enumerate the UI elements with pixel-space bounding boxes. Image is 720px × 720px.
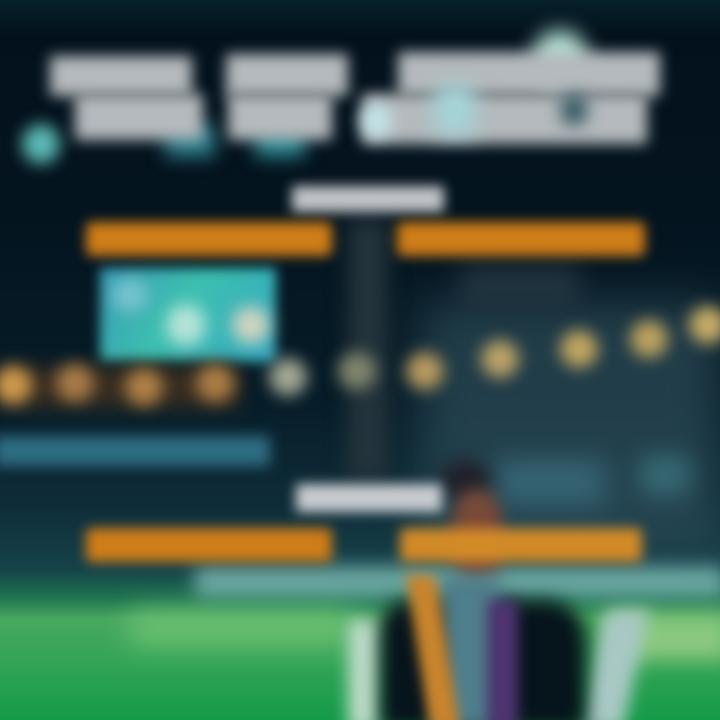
shirt centre <box>440 575 500 720</box>
head <box>452 490 502 580</box>
title <box>11 15 671 175</box>
title glow: under word 1 <box>165 125 215 157</box>
background: crowd highlight right <box>640 455 690 495</box>
stand band behind the field edge <box>195 566 720 598</box>
panel dot: right <box>232 306 270 344</box>
light 3 <box>125 368 163 406</box>
title line 1 word 1 <box>50 56 192 96</box>
row of lights <box>0 294 720 420</box>
light 9 <box>560 330 598 368</box>
lower left orange bar <box>86 528 332 562</box>
person <box>336 454 657 720</box>
hair <box>440 460 490 500</box>
orange sash <box>406 575 460 720</box>
teal panel <box>100 268 276 362</box>
title line 2 word 2 <box>228 94 332 140</box>
title line 1 word 3 <box>398 52 660 96</box>
dark jacket <box>380 600 586 720</box>
light band: warm left <box>0 367 240 407</box>
light 6 <box>338 352 376 390</box>
title glow: under word 2 <box>255 125 305 157</box>
light 11 <box>689 306 720 344</box>
heading: lower label <box>296 484 442 512</box>
white shirt right <box>579 610 649 720</box>
background: upper-right crowd haze <box>460 265 580 305</box>
title line 2 word 3 <box>362 94 647 144</box>
title highlight: centre <box>435 85 475 135</box>
heading: upper label <box>292 186 444 212</box>
light 8 <box>481 340 519 378</box>
background: stadium crowd haze <box>420 300 720 550</box>
purple sash <box>488 600 518 720</box>
upper right orange bar <box>397 222 645 256</box>
field highlight left <box>130 612 350 646</box>
light 7 <box>406 352 444 390</box>
title glow: bottom left <box>22 124 60 164</box>
title dark hole <box>560 94 588 126</box>
upper left orange bar <box>86 222 332 256</box>
panel dot: left <box>112 278 148 312</box>
panel dot: centre <box>166 304 206 346</box>
background: crowd highlights <box>495 460 605 505</box>
title line 2 word 1 <box>75 94 203 140</box>
background: centre pillar <box>348 220 388 480</box>
light 1 <box>0 366 32 404</box>
title glow: top right <box>532 30 588 86</box>
title line 1 word 2 <box>226 54 348 96</box>
light 2 <box>56 364 94 402</box>
field highlight right <box>610 615 720 660</box>
title highlight: dot <box>360 105 392 137</box>
white shirt left <box>348 620 382 720</box>
lower right orange bar <box>400 528 642 562</box>
light 5 <box>269 358 307 396</box>
light 4 <box>196 364 234 402</box>
light 10 <box>630 320 668 358</box>
teal text band <box>0 436 270 466</box>
